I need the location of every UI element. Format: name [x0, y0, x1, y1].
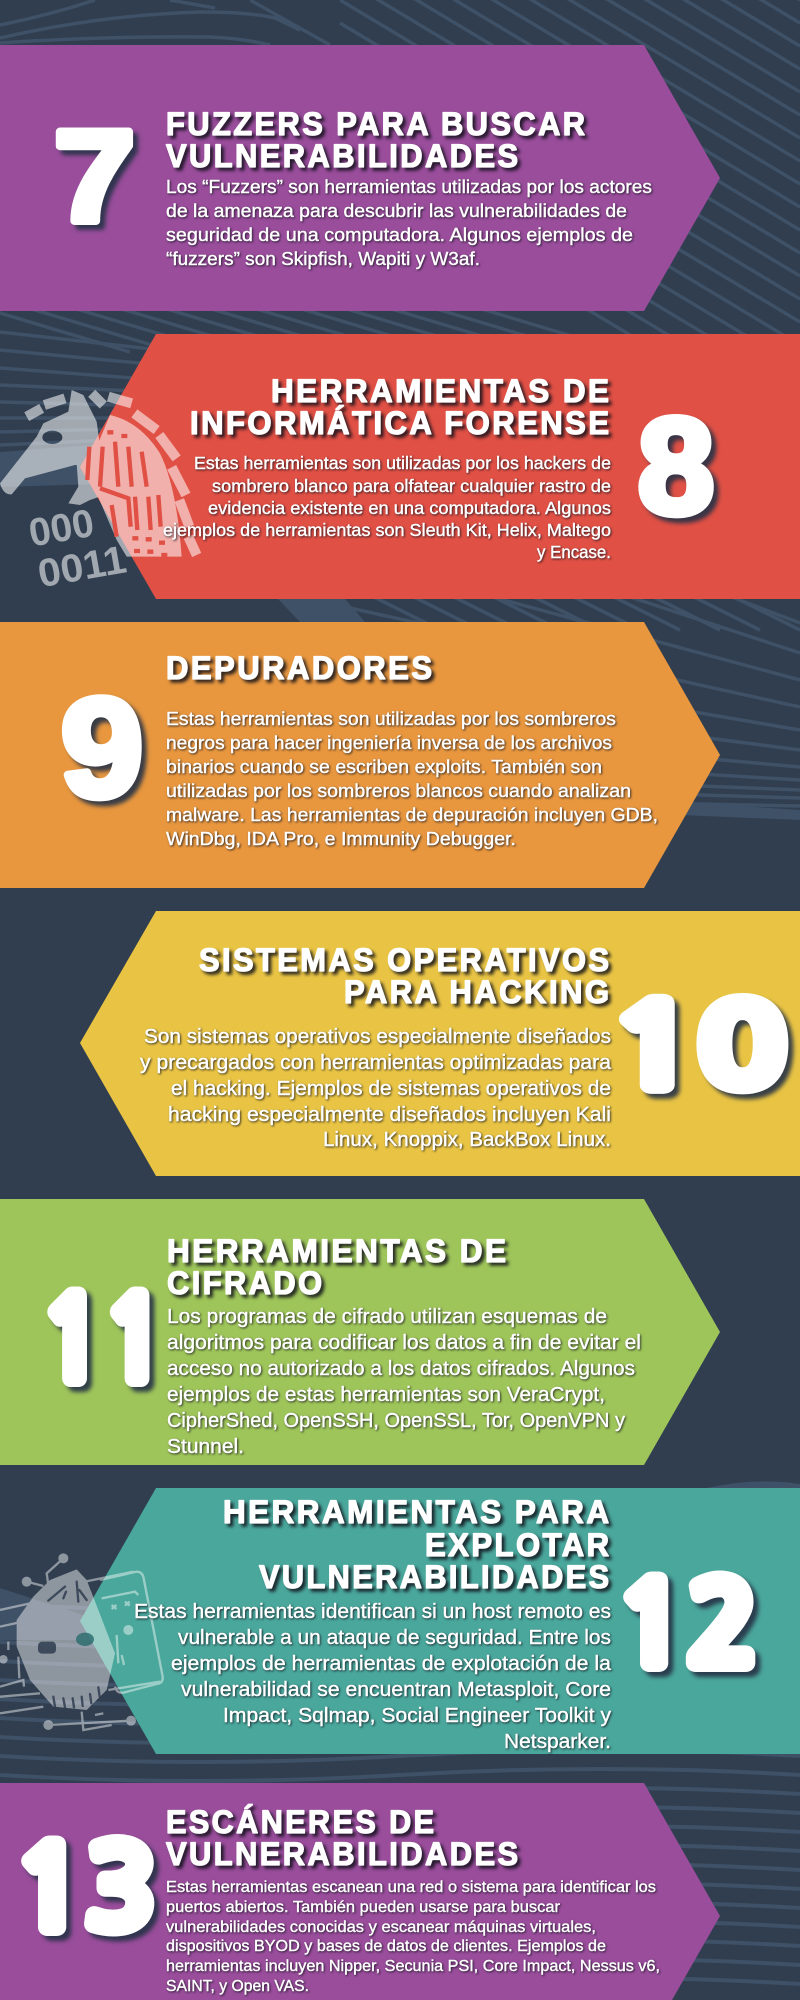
- body text: Estas herramientas identifican si un host remoto es: [134, 1601, 611, 1623]
- body text: vulnerabilidades conocidas y escanear máquinas virtuales,: [166, 1919, 596, 1936]
- body text: [166, 709, 658, 849]
- icon: trojan horse fingerprint: 0011: [35, 537, 130, 596]
- body text: “fuzzers” son Skipfish, Wapiti y W3af.: [166, 249, 480, 269]
- body text: [134, 1601, 612, 1753]
- body text: [166, 1879, 660, 1995]
- body text: [166, 177, 652, 269]
- icon: trojan horse fingerprint: [0, 390, 197, 596]
- body text: el hacking. Ejemplos de sistemas operativos de: [171, 1078, 611, 1100]
- body text: herramientas incluyen Nipper, Secunia PSI, Core Impact, Nessus v6,: [166, 1958, 660, 1975]
- body text: vulnerable a un ataque de seguridad. Entre los: [178, 1627, 611, 1649]
- body text: seguridad de una computadora. Algunos ejemplos de: [166, 225, 633, 245]
- body text: binarios cuando se escriben exploits. También son: [166, 757, 602, 777]
- body text: Linux, Knoppix, BackBox Linux.: [323, 1129, 611, 1151]
- body text: Estas herramientas escanean una red o sistema para identificar los: [166, 1879, 656, 1896]
- number 10: 10: [610, 992, 786, 1103]
- body text: y Encase.: [537, 542, 611, 562]
- number 12: 12: [616, 1570, 758, 1681]
- panel: 12 exploitation tools: [0, 1488, 800, 1754]
- panel: 7 fuzzers: [0, 45, 720, 311]
- heading: HERRAMIENTAS DE: [167, 1233, 508, 1269]
- panel: 10 hacking operating systems: [80, 911, 800, 1176]
- heading: INFORMÁTICA FORENSE: [190, 405, 612, 441]
- body text: Los programas de cifrado utilizan esquemas de: [167, 1306, 607, 1328]
- body text: CipherShed, OpenSSH, OpenSSL, Tor, OpenVPN y: [167, 1410, 625, 1432]
- heading: VULNERABILIDADES: [166, 1836, 520, 1872]
- body text: ejemplos de herramientas son Sleuth Kit, Helix, Maltego: [163, 520, 611, 540]
- body text: evidencia existente en una computadora. Algunos: [208, 498, 611, 518]
- panel shape: red arrow: [80, 334, 800, 599]
- number 11: 11: [41, 1285, 166, 1396]
- number 8: 8: [638, 390, 714, 542]
- body text: sombrero blanco para olfatear cualquier rastro de: [212, 476, 611, 496]
- heading: EXPLOTAR: [425, 1527, 612, 1563]
- body text: [167, 1306, 641, 1458]
- heading: HERRAMIENTAS DE: [271, 373, 612, 409]
- body text: ejemplos de herramientas de explotación de la: [171, 1653, 612, 1675]
- panel shape: purple arrow: [0, 1783, 720, 2000]
- heading: [166, 1804, 520, 1872]
- body text: de la amenaza para descubrir las vulnerabilidades de: [166, 201, 627, 221]
- heading: [190, 373, 612, 441]
- heading: [223, 1494, 612, 1595]
- body text: Netsparker.: [504, 1731, 611, 1753]
- body text: ejemplos de estas herramientas son VeraCrypt,: [167, 1384, 605, 1406]
- body text: WinDbg, IDA Pro, e Immunity Debugger.: [166, 829, 516, 849]
- body text: Son sistemas operativos especialmente diseñados: [144, 1026, 611, 1048]
- body text: utilizadas por los sombreros blancos cuando analizan: [166, 781, 631, 801]
- body text: dispositivos BYOD y bases de datos de clientes. Ejemplos de: [166, 1938, 606, 1955]
- heading: PARA HACKING: [344, 974, 612, 1010]
- panel shape: green arrow: [0, 1199, 720, 1465]
- body text: acceso no autorizado a los datos cifrados. Algunos: [167, 1358, 635, 1380]
- heading: CIFRADO: [167, 1265, 324, 1301]
- body text: Estas herramientas son utilizadas por los sombreros: [166, 709, 616, 729]
- body text: algoritmos para codificar los datos a fin de evitar el: [167, 1332, 641, 1354]
- heading: SISTEMAS OPERATIVOS: [199, 942, 612, 978]
- heading: FUZZERS PARA BUSCAR: [166, 106, 588, 142]
- heading: [199, 942, 612, 1010]
- panel: 9 debuggers: [0, 622, 720, 888]
- body text: SAINT, y Open VAS.: [166, 1978, 309, 1995]
- body text: negros para hacer ingeniería inversa de los archivos: [166, 733, 612, 753]
- body text: Los “Fuzzers” son herramientas utilizadas por los actores: [166, 177, 652, 197]
- panel: 11 encryption tools: [0, 1199, 720, 1465]
- heading: ESCÁNERES DE: [166, 1804, 436, 1840]
- heading: HERRAMIENTAS PARA: [223, 1494, 612, 1530]
- icon: bug with phone: [0, 1553, 163, 1730]
- number 13: 13: [14, 1834, 156, 1945]
- body text: vulnerabilidad se encuentran Metasploit, Core: [181, 1679, 611, 1701]
- panel shape: purple arrow: [0, 45, 720, 311]
- body text: Stunnel.: [167, 1436, 244, 1458]
- panel shape: orange arrow: [0, 622, 720, 888]
- icon: trojan horse fingerprint: 000: [26, 501, 97, 556]
- body text: [140, 1026, 612, 1151]
- body text: puertos abiertos. También pueden usarse para buscar: [166, 1899, 561, 1916]
- body text: y precargados con herramientas optimizadas para: [140, 1052, 612, 1074]
- number 7: 7: [54, 103, 135, 249]
- panel: 13 vulnerability scanners: [0, 1783, 720, 2000]
- heading: DEPURADORES: [166, 650, 434, 686]
- heading: VULNERABILIDADES: [166, 138, 520, 174]
- body text: [163, 453, 611, 562]
- body text: hacking especialmente diseñados incluyen Kali: [168, 1104, 611, 1126]
- body text: malware. Las herramientas de depuración incluyen GDB,: [166, 805, 658, 825]
- panel shape: yellow arrow: [80, 911, 800, 1176]
- panel: 8 forensic tools: [0, 334, 800, 599]
- heading: VULNERABILIDADES: [259, 1559, 612, 1595]
- number 9: 9: [61, 669, 143, 826]
- panel shape: teal arrow: [80, 1488, 800, 1754]
- body text: Impact, Sqlmap, Social Engineer Toolkit y: [223, 1705, 611, 1727]
- body text: Estas herramientas son utilizadas por los hackers de: [194, 453, 611, 473]
- heading: [167, 1233, 508, 1301]
- heading: [166, 106, 588, 174]
